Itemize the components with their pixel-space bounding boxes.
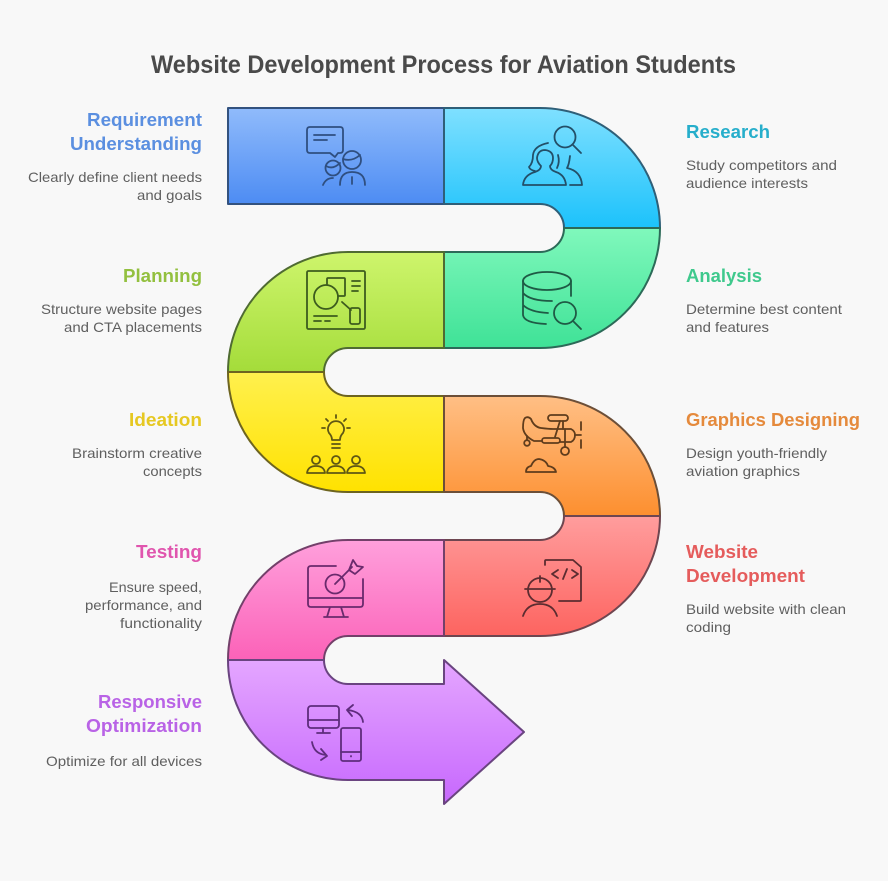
text block: website development: Website	[686, 542, 758, 562]
text block: requirement understanding: and goals	[137, 187, 202, 203]
text block: planning: and CTA placements	[64, 319, 202, 335]
text block: website development	[686, 542, 846, 635]
text block: graphics designing: Design youth-friendly	[686, 445, 827, 461]
text block: research: Study competitors and	[686, 157, 837, 173]
text block: responsive optimization: Optimize for all devices	[46, 753, 202, 769]
text block: requirement understanding: Requirement	[87, 110, 202, 130]
icon: people and magnifier	[523, 126, 582, 185]
text block: planning: Planning	[123, 266, 202, 286]
icon: database and magnifier	[523, 272, 581, 329]
text block: ideation: Ideation	[129, 410, 202, 430]
text block: testing	[85, 542, 202, 631]
text block: requirement understanding	[28, 110, 202, 203]
text block: analysis: Analysis	[686, 266, 762, 286]
text block: testing: Testing	[136, 542, 202, 562]
icon: speech bubble and two people	[307, 127, 365, 185]
panel: planning segment	[228, 252, 444, 372]
text block: testing: functionality	[120, 615, 202, 631]
text block: graphics designing: Graphics Designing	[686, 410, 860, 430]
text block: responsive optimization	[46, 692, 202, 769]
panel: graphics designing segment	[444, 396, 660, 516]
icon: wireframe board	[307, 271, 365, 329]
text block: research	[686, 122, 837, 191]
title: Website Development Process for Aviation Students	[151, 51, 736, 79]
text block: testing: performance, and	[85, 597, 202, 613]
text block: requirement understanding: Understanding	[70, 134, 202, 154]
icon: lightbulb and three people	[307, 415, 365, 473]
text block: responsive optimization: Optimization	[86, 716, 202, 736]
icon: developer and code document	[523, 560, 581, 616]
text block: website development: Build website with clean	[686, 601, 846, 617]
text block: requirement understanding: Clearly define client needs	[28, 169, 202, 185]
panel: responsive optimization arrow segment	[228, 660, 524, 804]
text block: research: audience interests	[686, 175, 808, 191]
panel: website development segment	[444, 516, 660, 636]
panel: ideation segment	[228, 372, 444, 492]
text block: analysis	[686, 266, 842, 335]
text block: planning	[41, 266, 202, 335]
text block: website development: coding	[686, 619, 731, 635]
text block: analysis: Determine best content	[686, 301, 842, 317]
panel: testing segment	[228, 540, 444, 660]
icon: devices with sync arrows	[308, 705, 363, 761]
text block: website development: Development	[686, 566, 805, 586]
text block: graphics designing	[686, 410, 860, 479]
text block: graphics designing: aviation graphics	[686, 463, 800, 479]
icon: monitor with target and arrow	[308, 560, 363, 617]
icon: biplane and cloud	[523, 415, 581, 472]
text block: planning: Structure website pages	[41, 301, 202, 317]
text block: responsive optimization: Responsive	[98, 692, 202, 712]
text block: ideation: concepts	[143, 463, 202, 479]
panel: analysis segment	[444, 228, 660, 348]
panel: research segment	[444, 108, 660, 228]
text block: analysis: and features	[686, 319, 769, 335]
text block: ideation	[72, 410, 202, 479]
text block: research: Research	[686, 122, 770, 142]
text block: ideation: Brainstorm creative	[72, 445, 202, 461]
panel: requirement understanding segment	[228, 108, 444, 204]
text block: testing: Ensure speed,	[109, 579, 202, 595]
